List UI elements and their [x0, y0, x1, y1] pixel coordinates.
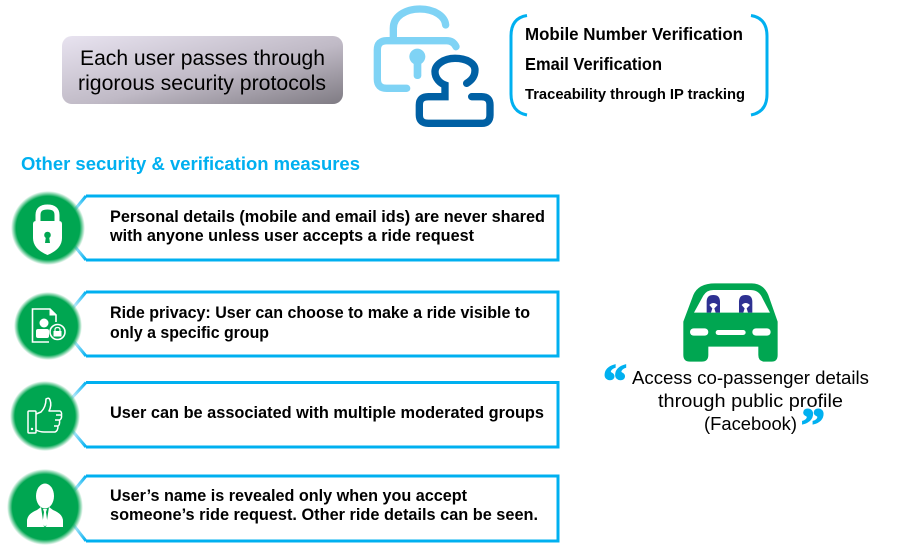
- panel: personal details: with anyone unless user accepts a ride request: [109, 227, 474, 245]
- panel: verification list: Email Verification: [525, 54, 662, 74]
- panel: name revealed: someone’s ride request. Other ride details can be seen.: [110, 506, 538, 524]
- icon: thumbs up: [28, 398, 62, 433]
- panel: security protocols statement: [62, 36, 343, 104]
- panel: personal details: Personal details (mobile and email ids) are never shared: [110, 208, 545, 226]
- callout: co-passenger details quote: ”: [801, 399, 825, 452]
- panel: verification list: [511, 16, 767, 115]
- icon: shield padlock: [33, 207, 62, 255]
- panel: verification list: Mobile Number Verification: [525, 24, 743, 44]
- panel: name revealed: User’s name is revealed only when you accept: [110, 487, 467, 505]
- icon: car with passengers: [683, 283, 778, 362]
- panel: ride privacy: Ride privacy: User can choose to make a ride visible to: [110, 304, 530, 322]
- panel: security protocols statement: Each user passes through: [80, 47, 325, 70]
- callout: co-passenger details quote: Access co-passenger details: [632, 367, 869, 388]
- icon: padlock and user: [377, 9, 490, 123]
- callout: co-passenger details quote: (Facebook): [704, 413, 797, 434]
- panel: verification list: Traceability through IP tracking: [525, 87, 745, 103]
- callout: co-passenger details quote: “: [603, 355, 627, 408]
- icon: person in suit: [27, 484, 63, 527]
- callout: co-passenger details quote: through public profile: [658, 390, 843, 411]
- panel: ride privacy: only a specific group: [110, 324, 269, 342]
- panel: moderated groups: User can be associated with multiple moderated groups: [110, 404, 544, 422]
- panel: security protocols statement: rigorous security protocols: [78, 72, 326, 95]
- panel: personal details: [11, 191, 558, 265]
- panel: name revealed: [7, 469, 558, 545]
- callout: co-passenger details quote: [603, 355, 869, 452]
- panel: moderated groups: [10, 381, 558, 451]
- panel: ride privacy: [14, 292, 558, 360]
- icon: document with lock: [32, 309, 65, 342]
- heading: other security measures: Other security & verification measures: [21, 154, 360, 174]
